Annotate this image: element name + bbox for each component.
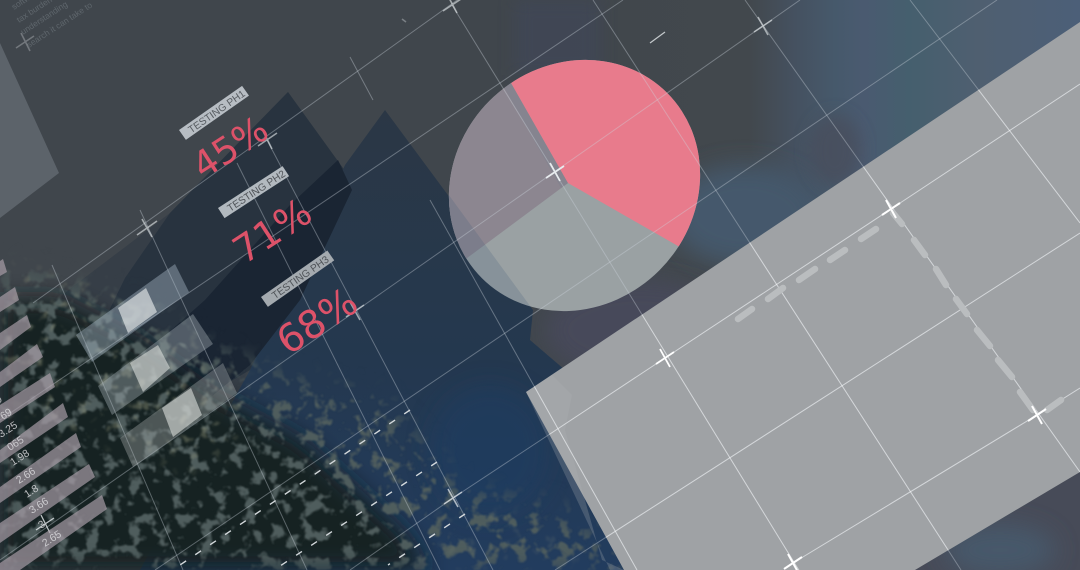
pie slice: pink [511,60,700,246]
tag: testing ph3: TESTING PH3 [270,254,332,302]
dashed white guides in lower centre [180,410,465,568]
faint caption text at top left: search it can take to [25,0,94,50]
tag: testing ph1: TESTING PH1 [187,88,248,136]
value: 45%: 45% [184,107,276,188]
value: 71%: 71% [225,190,320,273]
background: dark tree foliage [0,270,623,570]
value labels: 3 [36,518,48,532]
value labels: 1.8 [22,482,41,501]
panel: large light grey sheet [526,22,1080,570]
value: 68%: 68% [269,279,366,364]
building: left tower [90,92,348,440]
stat: testing phase 2 [218,166,320,273]
value labels: 2.66 [14,465,38,487]
background: tall building silhouettes [0,92,624,570]
building: front tower [140,110,624,570]
stacked bar 1 [76,264,189,362]
building showing through the pie [449,196,530,306]
building edge showing through the grey sheet [526,375,624,570]
value labels [0,393,64,550]
chart: diagonal value bars at left edge [0,259,107,570]
chart: three translucent stacked bars [76,264,237,467]
building: shadow band [160,160,352,410]
tag: testing ph2: TESTING PH2 [226,169,288,214]
building: left tower outer haze [0,92,350,570]
pie slice: mauve [448,83,566,258]
panel: faint translucent sheet at top left [0,0,94,218]
background: blurred blue glass facade at top right [510,0,1080,570]
pie slice: grey [397,8,752,363]
faint caption text at top left: understanding [19,0,70,37]
alignment grid lines over the grey sheet [534,84,1080,570]
value labels: 1.98 [8,447,32,469]
stacked bar 3 [120,363,237,467]
stat: testing phase 1 [179,86,276,188]
stacked bar 2 [98,314,213,415]
stat: testing phase 3 [261,251,366,364]
value labels: 3.66 [27,495,51,517]
value bars [0,259,107,570]
pie chart [448,60,700,312]
value labels: 065 [5,434,26,454]
pie slice divider [483,46,568,188]
rounded dashed path on the grey sheet [738,213,1061,410]
value labels: 2.65 [40,528,64,550]
